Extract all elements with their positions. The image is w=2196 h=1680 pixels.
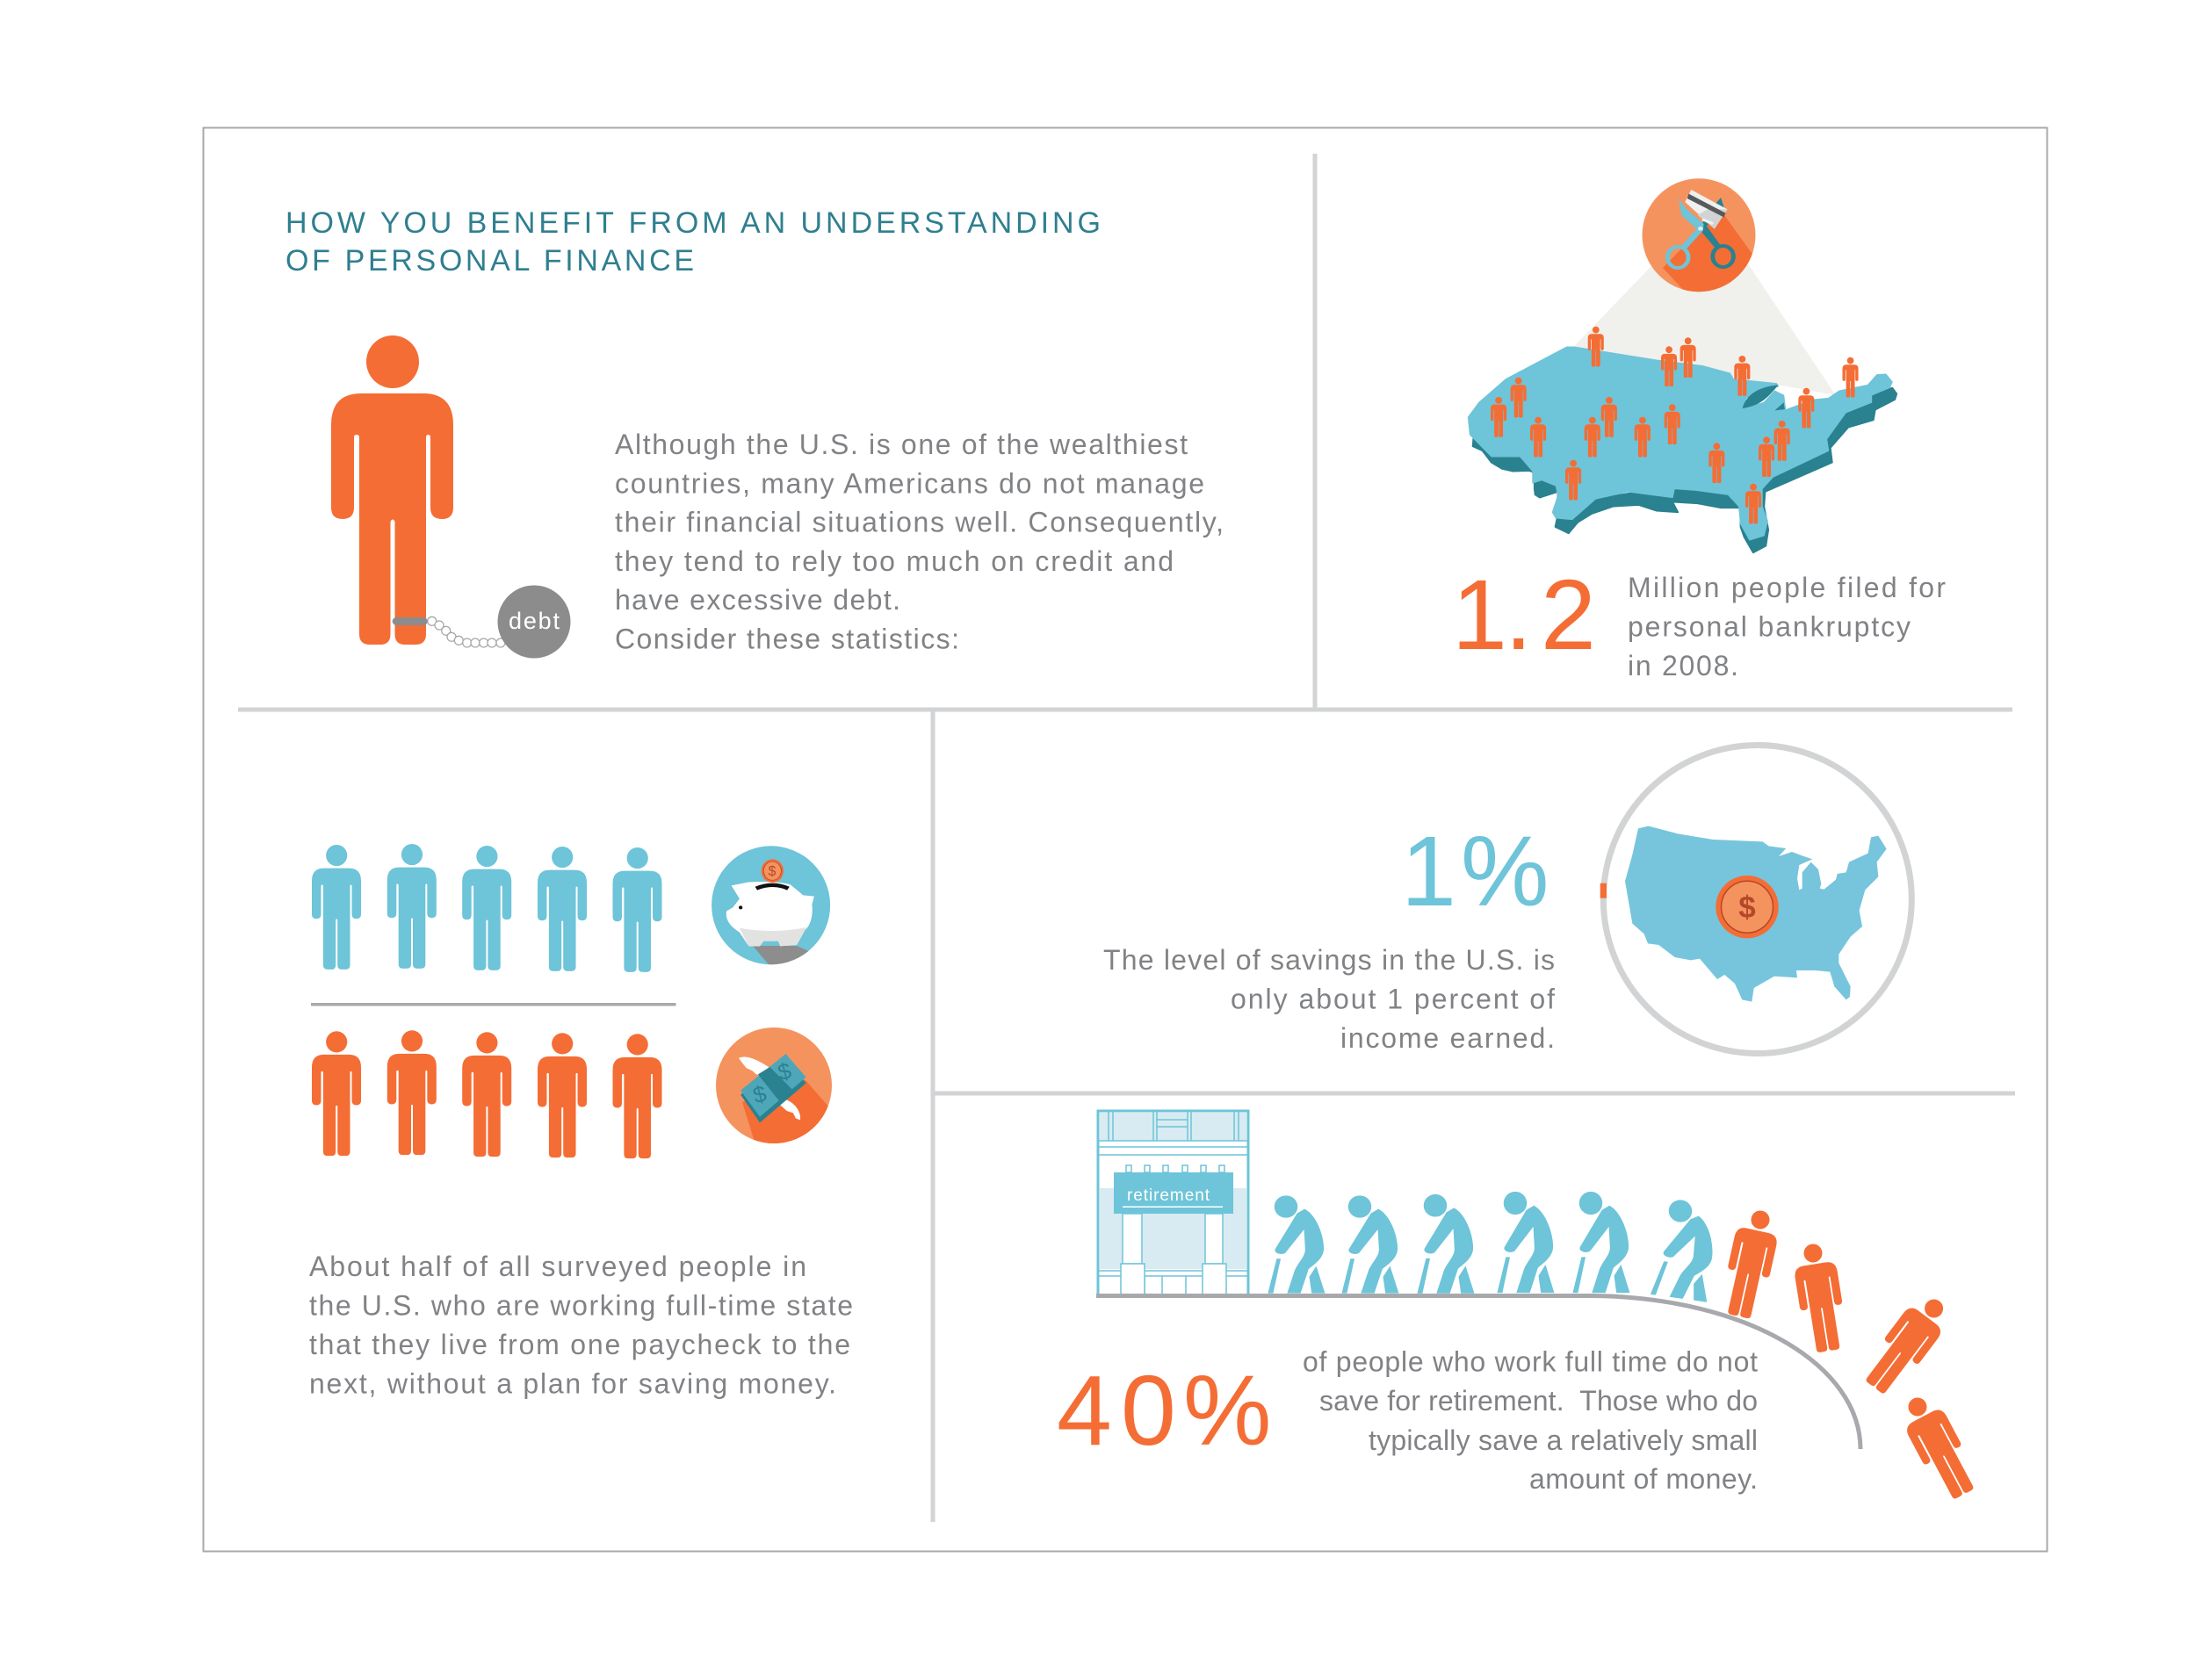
ring: [1603, 745, 1911, 1054]
columns: [1121, 1214, 1226, 1294]
cliff edge line: [1096, 1296, 1860, 1449]
light blade: [1679, 199, 1704, 249]
icon: flying money: $: [775, 1057, 794, 1085]
pig belly: [740, 927, 806, 946]
bankruptcy text: [1628, 572, 1946, 681]
icon: scissors cutting a credit card: [1643, 178, 1755, 292]
falling orange figures: [1718, 1206, 1983, 1504]
bankruptcy text: personal bankruptcy: [1628, 611, 1911, 643]
savings text: only about 1 percent of: [1231, 984, 1555, 1015]
people on map: [1491, 327, 1859, 523]
panel dividers: [238, 154, 2015, 1522]
retirement text: typically save a relatively small: [1369, 1424, 1758, 1456]
savings text: income earned.: [1340, 1022, 1555, 1054]
stat: 1%: 1%: [1401, 816, 1549, 927]
paycheck text: next, without a plan for saving money.: [309, 1368, 836, 1400]
paycheck text: the U.S. who are working full-time state: [309, 1289, 853, 1321]
icon: U.S. map with coin in ring: [1600, 745, 1911, 1054]
title: OF PERSONAL FINANCE: [285, 244, 694, 278]
title: [285, 206, 1101, 278]
long shadow: [1663, 216, 1752, 292]
stat: 1.2: 1.2: [1452, 559, 1596, 670]
credit card: [1685, 190, 1728, 229]
bankruptcy: 3D map of the U.S.: [1468, 347, 1896, 552]
ground shadow: [754, 946, 808, 964]
lower facade: [1100, 1188, 1246, 1269]
paper band: [758, 1067, 793, 1102]
intro text: countries, many Americans do not manage: [615, 467, 1204, 499]
sign brackets: [1126, 1165, 1224, 1172]
icon: piggy bank: [712, 846, 830, 975]
retirement text: amount of money.: [1529, 1463, 1758, 1495]
intro text: have excessive debt.: [615, 584, 900, 616]
map surface: [1468, 347, 1892, 540]
outer frame: [204, 128, 2047, 1551]
map: [1625, 826, 1887, 1002]
row of orange people: [312, 1030, 662, 1158]
stat: 40%: 40%: [1057, 1355, 1271, 1466]
money stack: [740, 1058, 806, 1122]
shackle: [393, 617, 428, 625]
long shadow: [742, 1080, 828, 1143]
bankruptcy text: in 2008.: [1628, 650, 1738, 681]
debt ball: [497, 585, 571, 659]
coin dollar sign: $: [769, 864, 777, 879]
icon: flying money: [716, 1027, 834, 1150]
eye: [739, 905, 742, 909]
map extrusion: [1473, 388, 1896, 552]
coin: [762, 859, 784, 883]
sign label: retirement: [1127, 1186, 1210, 1205]
one percent tick: [1600, 883, 1607, 898]
icon: retirement building: [1098, 1111, 1248, 1295]
chain: [428, 616, 505, 647]
intro text: their financial situations well. Consequently,: [615, 507, 1224, 538]
intro text: Although the U.S. is one of the wealthiest: [615, 429, 1188, 460]
savings text: [1103, 944, 1555, 1054]
intro text: [615, 429, 1224, 655]
great lake: [1743, 385, 1785, 410]
pivot: [1698, 227, 1703, 231]
retirement text: of people who work full time do not: [1303, 1345, 1758, 1377]
sign: [1114, 1172, 1233, 1214]
dark blade: [1699, 198, 1724, 249]
coin: [1716, 876, 1779, 938]
coin dollar sign: $: [1738, 890, 1756, 925]
row of blue people: [312, 844, 662, 972]
intro text: they tend to rely too much on credit and: [615, 545, 1174, 577]
paycheck text: [309, 1251, 853, 1400]
bankruptcy: light cone from icon to map: [1572, 263, 1836, 395]
coin slot: [756, 885, 788, 889]
elderly walking figures: [1268, 1192, 1721, 1302]
debt label: debt: [509, 608, 560, 634]
paycheck text: About half of all surveyed people in: [309, 1251, 806, 1282]
intro text: Consider these statistics:: [615, 624, 959, 655]
savings text: The level of savings in the U.S. is: [1103, 944, 1555, 976]
pig body: [726, 882, 814, 946]
paycheck text: that they live from one paycheck to the: [309, 1329, 850, 1360]
upper facade: [1100, 1113, 1246, 1141]
divider between rows: [311, 1003, 676, 1006]
retirement text: [1303, 1345, 1758, 1495]
wings: [739, 1057, 769, 1076]
dollar signs: $: [750, 1080, 769, 1108]
bankruptcy text: Million people filed for: [1628, 572, 1946, 603]
retirement text: save for retirement. Those who do: [1319, 1385, 1758, 1417]
title: HOW YOU BENEFIT FROM AN UNDERSTANDING: [285, 206, 1101, 240]
icon: person chained to debt ball: [331, 335, 571, 659]
